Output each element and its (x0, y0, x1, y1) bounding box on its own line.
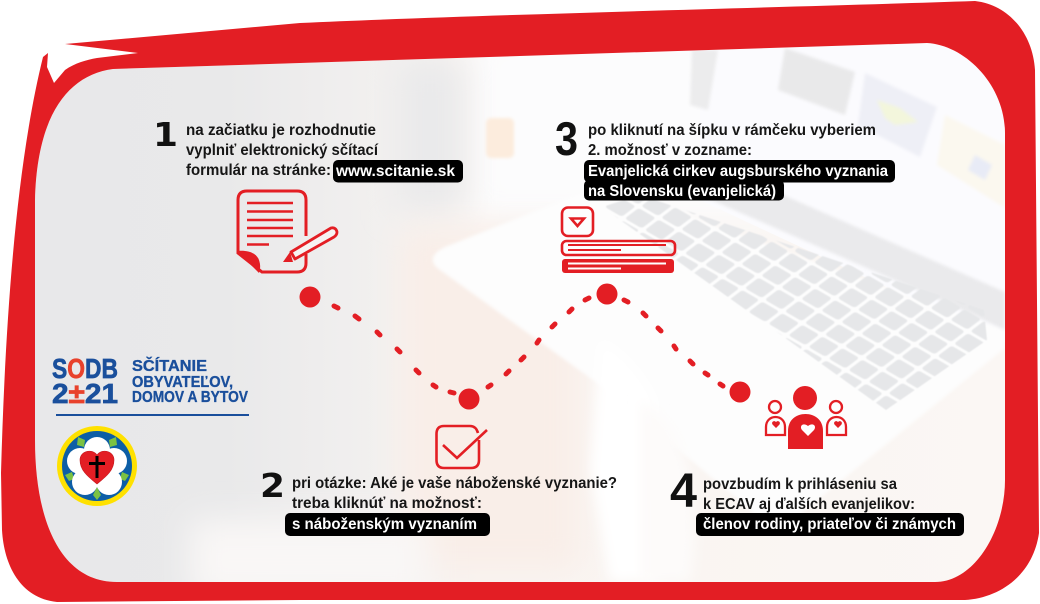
step 1 text (186, 122, 379, 179)
answer pill: s náboženským vyznaním (292, 516, 477, 533)
step 3 text: po kliknutí na šípku v rámčeku vyberiem (588, 122, 876, 139)
logo wordmark: OBYVATEĽOV, (132, 374, 233, 391)
Luther rose emblem (57, 426, 137, 506)
dotted route with four stops (300, 284, 750, 410)
number 3: 3 (555, 112, 578, 165)
invitation pill: členov rodiny, priateľov či známych (703, 516, 956, 533)
step 1 text: formulár na stránke: (186, 162, 331, 179)
number 2: 2 (260, 466, 285, 505)
step 2 text: pri otázke: Aké je vaše náboženské vyznanie? (292, 475, 617, 492)
icon: document with pencil (237, 191, 337, 273)
url pill: www.scitanie.sk (335, 163, 455, 180)
logo wordmark: DOMOV A BYTOV (132, 389, 249, 406)
answer pill (285, 513, 490, 536)
church name pills: na Slovensku (evanjelická) (588, 183, 776, 200)
step 2 (260, 426, 617, 536)
church name pills: Evanjelická cirkev augsburského vyznania (588, 163, 888, 180)
step 3 (555, 112, 895, 273)
step 4 (670, 386, 964, 536)
url pill (333, 160, 463, 182)
step 4 text (703, 476, 915, 513)
icon: group of people with hearts (766, 386, 846, 449)
logo mark SODB 2021 (52, 353, 118, 409)
step 1 (153, 115, 463, 273)
step 3 text: 2. možnosť v zozname: (588, 142, 752, 159)
logo mark SODB 2021: SODB (52, 353, 118, 384)
logo wordmark: SČÍTANIE (132, 357, 207, 375)
step 4 text: k ECAV aj ďalších evanjelikov: (703, 496, 915, 513)
step 1 text: vyplniť elektronický sčítací (186, 142, 379, 159)
step 2 text (292, 475, 617, 512)
icon: dropdown list (562, 208, 675, 273)
census logo (52, 353, 249, 416)
step 4 text: povzbudím k prihláseniu sa (703, 476, 897, 493)
number 1: 1 (153, 115, 178, 154)
number 4: 4 (670, 465, 697, 518)
church name pills (584, 160, 895, 200)
logo mark SODB 2021: 2±21 (52, 378, 118, 409)
logo wordmark (132, 357, 249, 406)
step 3 text (588, 122, 876, 159)
icon: checkbox with tick (436, 426, 487, 468)
step 1 text: na začiatku je rozhodnutie (186, 122, 376, 139)
step 2 text: treba kliknúť na možnosť: (292, 495, 482, 512)
